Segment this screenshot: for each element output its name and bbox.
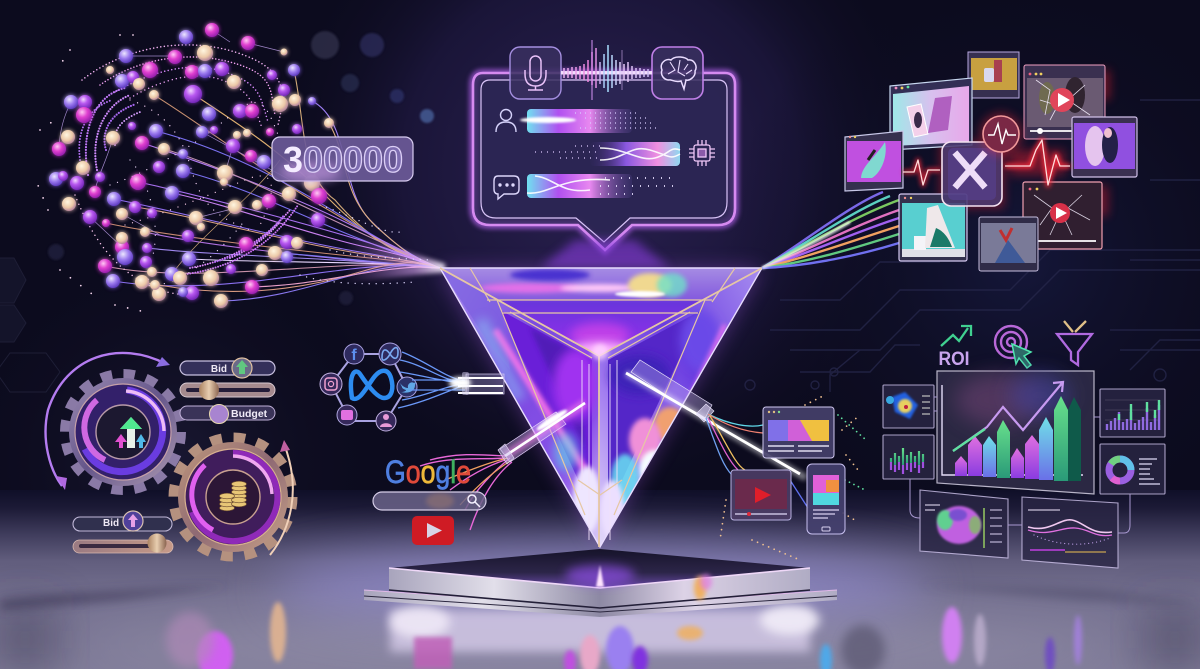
- text stream row 3: [527, 174, 680, 198]
- card: teal and pink products: [890, 78, 972, 150]
- card: dark video with cracks: [1023, 182, 1102, 249]
- arrow: rotation right gear: [270, 440, 293, 555]
- counter panel: [272, 137, 413, 182]
- slider: lower knob: [73, 534, 173, 553]
- prism wireframe: [440, 268, 762, 547]
- icon: ROI: ROI: [938, 349, 970, 370]
- icon: growth arrows: [115, 417, 146, 448]
- bokeh circles: [48, 31, 1006, 305]
- card: video with cracks: [1024, 65, 1105, 139]
- icon: small meta: [379, 343, 401, 365]
- icon: instagram: [320, 373, 342, 395]
- floor reflections: [166, 602, 1082, 669]
- logo: meta: [351, 371, 392, 399]
- icon: chip: [689, 140, 715, 166]
- prism right facet colours: [600, 310, 725, 540]
- icon: target cursor: [995, 326, 1031, 368]
- performance icons: [938, 321, 1092, 370]
- red glow behind cards: [940, 70, 1110, 216]
- faint hexagons: [0, 258, 60, 392]
- light rising from prism to bubble: [540, 240, 670, 268]
- slider: Bid lower: Bid: [103, 518, 119, 529]
- fibers and tube: Meta to prism: [398, 352, 504, 408]
- X rejection tile: [942, 142, 1002, 206]
- slider: Bid top: [180, 358, 275, 378]
- gear: left with growth arrows: [66, 375, 180, 489]
- icon: magnifier: [468, 495, 480, 507]
- search bar: [373, 492, 486, 510]
- heartbeat circle: [980, 113, 1022, 155]
- data nodes: [49, 23, 334, 308]
- tube and beam: prism to ad formats: [626, 360, 808, 508]
- central prism: [440, 268, 762, 547]
- arrow: rotation left gear: [46, 353, 170, 490]
- ad format: video: [731, 470, 791, 520]
- panel: radar blob: [920, 490, 1008, 558]
- icon: ROI: [938, 326, 971, 370]
- slider: Bid lower: [73, 511, 172, 531]
- axes: [942, 385, 1083, 475]
- icon: person: [376, 411, 396, 431]
- bars: [955, 396, 1081, 481]
- logo: Google: Google: [385, 454, 471, 490]
- fibers and tube: Google to prism: [420, 403, 585, 530]
- sparkle dust: ad formats: [720, 395, 866, 560]
- icon: person: [496, 110, 516, 132]
- particle dust: [35, 35, 430, 312]
- floor: [0, 490, 1200, 669]
- icon: brain: [652, 47, 703, 99]
- card: teal creative: [899, 194, 967, 261]
- icon: YouTube: [412, 516, 454, 545]
- panel: trend scatter: [1022, 497, 1118, 568]
- text stream row 2: [535, 142, 680, 166]
- slider: middle: [180, 380, 275, 400]
- panel: donut chart: [1100, 444, 1165, 494]
- icon: microphone: [510, 47, 561, 99]
- icon: twitter: [397, 377, 417, 397]
- ad format: phone: [807, 464, 845, 534]
- icon: coin stacks: [220, 481, 246, 511]
- rainbow beams: prism to creatives: [762, 192, 899, 268]
- text stream row 1: [520, 109, 660, 133]
- slider: Bid top: Bid: [211, 364, 227, 375]
- gear: right with coins: [175, 439, 291, 555]
- slider: Budget: Budget: [231, 408, 268, 420]
- icon: facebook: f: [351, 347, 357, 364]
- slider: Budget: [180, 404, 275, 424]
- panel connectors: [910, 397, 1130, 533]
- pulse lines: [903, 140, 1070, 185]
- main dashboard panel: [937, 371, 1094, 494]
- counter digits: 300000: [283, 139, 403, 180]
- ad format: browser: [763, 407, 834, 458]
- faint circuit traces: [745, 100, 1200, 392]
- creative cards cluster: [845, 52, 1137, 271]
- panel: column chart small: [883, 435, 934, 479]
- panel: heatmap: [883, 385, 934, 428]
- card: woman portrait: [1072, 117, 1137, 177]
- trend arrow: [953, 382, 1063, 451]
- prism top facet colours: [458, 268, 744, 352]
- card: grey blue creative: [979, 217, 1038, 271]
- social hub: Meta ecosystem: [320, 343, 417, 431]
- icon: video: [337, 405, 357, 425]
- platform: [364, 549, 837, 617]
- prism left facet colours: [440, 268, 601, 534]
- panel: right bar chart: [1100, 389, 1165, 437]
- icon: chat: [494, 176, 519, 199]
- audio waveform: [561, 40, 652, 100]
- card: gold product: [968, 52, 1019, 98]
- icon: funnel: [1057, 321, 1092, 365]
- speech bubble panel: [473, 40, 735, 250]
- fiber bundle: data to prism: [59, 30, 445, 301]
- card: magenta creative: [845, 131, 903, 191]
